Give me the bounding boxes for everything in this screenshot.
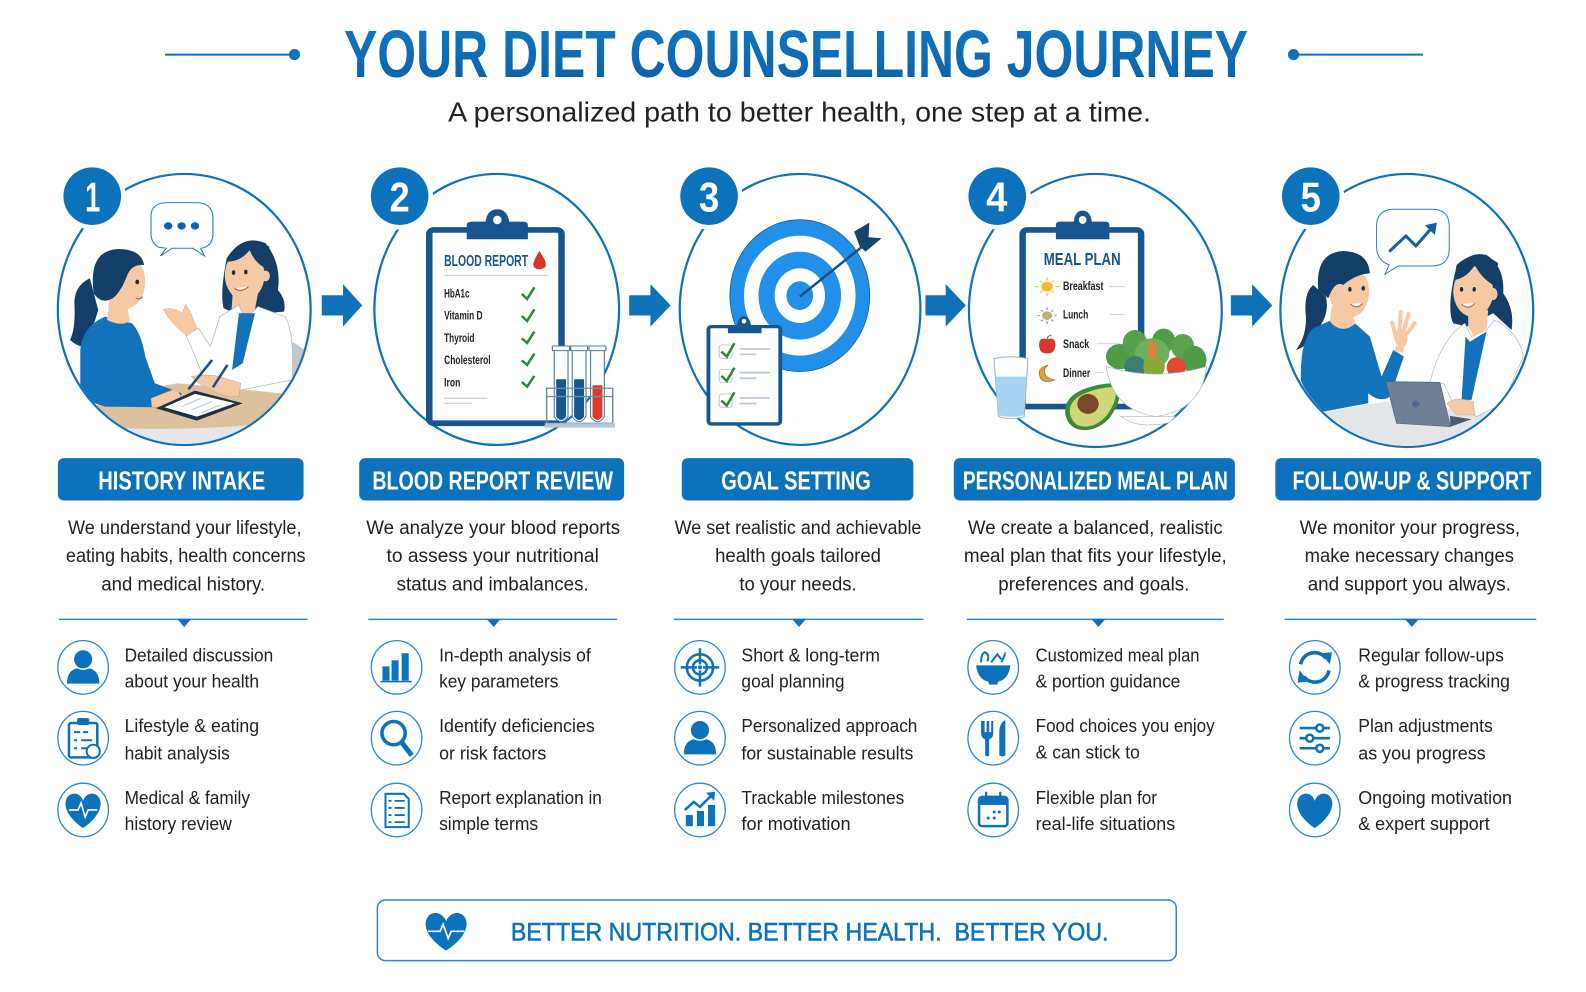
description: step 3: health goals tailored xyxy=(715,546,881,567)
bullet text: deficiencies: Identify deficiencies xyxy=(439,716,595,736)
description: step 3 xyxy=(675,518,921,596)
icon: magnifier xyxy=(371,711,422,765)
bullet text: medical: Medical & family xyxy=(125,788,251,808)
step 5 bullets xyxy=(1290,641,1512,837)
bullet text: adjustments: as you progress xyxy=(1358,743,1486,763)
description: step 1 xyxy=(66,518,306,596)
description: step 3: We set realistic and achievable xyxy=(675,518,921,539)
bullet text: flexible: real-life situations xyxy=(1036,814,1175,834)
bullet text: report: simple terms xyxy=(439,814,538,834)
step 4 bullets xyxy=(968,641,1216,837)
heading pill: blood report review: BLOOD REPORT REVIEW xyxy=(372,465,613,495)
step 4 illustration: meal plan xyxy=(969,174,1222,447)
bullet text: deficiencies xyxy=(439,716,595,763)
step 2 illustration: blood report: HbA1c xyxy=(444,287,470,300)
icon: growth chart xyxy=(675,783,725,837)
bullet text: adjustments: Plan adjustments xyxy=(1358,716,1493,736)
icon: bowl xyxy=(968,641,1019,694)
bullet text: discussion: Detailed discussion xyxy=(125,645,273,665)
bullet text: milestones: Trackable milestones xyxy=(741,788,904,808)
description: step 2: We analyze your blood reports xyxy=(366,518,620,539)
step 2 illustration: blood report: Cholesterol xyxy=(444,354,491,367)
step 5 badge xyxy=(1277,163,1344,230)
step 2 illustration: blood report: Thyroid xyxy=(444,332,474,345)
icon: crosshair target xyxy=(675,641,725,694)
step 3 illustration: goal target xyxy=(680,174,920,445)
heading pill: history intake: HISTORY INTAKE xyxy=(98,465,265,495)
icon: footer heart pulse xyxy=(426,913,467,951)
bullet text: personalized xyxy=(741,716,917,763)
step 4 illustration: meal plan: Snack xyxy=(1063,338,1090,351)
icon: heart pulse xyxy=(58,783,108,837)
step 3 badge: 3 xyxy=(699,173,719,220)
icon: document xyxy=(371,783,422,837)
bullet text: flexible xyxy=(1036,788,1175,834)
bullet text: adjustments xyxy=(1358,716,1493,763)
icon: bar chart xyxy=(371,641,422,694)
bullet text: analysis: key parameters xyxy=(439,672,558,692)
bullet text: food choices: Food choices you enjoy xyxy=(1036,716,1216,736)
heading pill: blood report review xyxy=(359,458,624,501)
step 2 illustration: blood report: BLOOD REPORT xyxy=(444,253,528,270)
bullet text: meal plan: Customized meal plan xyxy=(1036,645,1200,665)
bullet text: personalized: Personalized approach xyxy=(741,716,917,736)
bullet text: milestones xyxy=(741,788,904,834)
bullet text: discussion xyxy=(125,645,273,692)
step 2 illustration: blood report xyxy=(374,174,619,445)
description: step 5: We monitor your progress, xyxy=(1300,518,1520,539)
bullet text: food choices xyxy=(1036,716,1216,762)
description: step 4: We create a balanced, realistic xyxy=(968,518,1223,539)
step 5 illustration: follow-up xyxy=(1280,174,1533,457)
icon: person xyxy=(675,711,725,765)
description: step 2: status and imbalances. xyxy=(397,575,589,596)
description: step 5 xyxy=(1300,518,1520,596)
food: glass, avocado, salad bowl xyxy=(994,329,1206,430)
step 2 badge: 2 xyxy=(390,173,410,220)
heading pill: follow-up and support xyxy=(1275,458,1541,501)
bullet text: analysis: In-depth analysis of xyxy=(439,645,592,665)
description: step 4: preferences and goals. xyxy=(998,575,1189,596)
heading pill: goal setting xyxy=(682,458,913,501)
icon: person xyxy=(58,641,108,694)
step 2 badge xyxy=(366,163,433,230)
icon: calendar xyxy=(968,783,1019,837)
footer tagline: BETTER NUTRITION. BETTER HEALTH. BETTER YOU. xyxy=(511,918,1108,946)
step 1 illustration: consultation xyxy=(58,174,315,450)
step 4 badge xyxy=(964,163,1031,230)
arrow 4 to 5 xyxy=(1231,284,1272,327)
bullet text: planning: Short & long-term xyxy=(741,645,880,665)
description: step 1: and medical history. xyxy=(101,575,265,596)
bullet text: lifestyle: habit analysis xyxy=(125,743,230,763)
bullet text: milestones: for motivation xyxy=(741,814,851,834)
arrow 1 to 2 xyxy=(322,284,362,327)
step 4 illustration: meal plan: MEAL PLAN xyxy=(1044,249,1121,269)
subtitle: A personalized path to better health, one step at a time. xyxy=(448,96,1151,127)
icon: clipboard xyxy=(58,711,108,765)
icon: sliders xyxy=(1290,711,1340,765)
title ornament: left xyxy=(165,49,300,60)
bullet text: report xyxy=(439,788,602,834)
bullet text: motivation: Ongoing motivation xyxy=(1358,788,1512,808)
bullet text: flexible: Flexible plan for xyxy=(1036,788,1157,808)
bullet text: motivation xyxy=(1358,788,1512,834)
title ornament: right xyxy=(1288,49,1423,60)
description: step 2: to assess your nutritional xyxy=(386,546,599,567)
description: step 3: to your needs. xyxy=(739,575,857,596)
step 4 badge: 4 xyxy=(986,173,1007,220)
heading pill: goal setting: GOAL SETTING xyxy=(721,465,871,495)
description: step 1: We understand your lifestyle, xyxy=(68,518,302,539)
icon: refresh xyxy=(1290,641,1340,694)
footer banner xyxy=(377,900,1176,961)
description: step 5: and support you always. xyxy=(1308,575,1511,596)
bullet text: medical: history review xyxy=(125,814,233,834)
bullet text: motivation: & expert support xyxy=(1358,814,1490,834)
bullet text: planning: goal planning xyxy=(741,672,845,692)
icon: fork and knife xyxy=(968,711,1019,765)
step 4 illustration: meal plan: Dinner xyxy=(1063,367,1091,380)
bullet text: discussion: about your health xyxy=(125,672,259,692)
step 2 illustration: blood report: Vitamin D xyxy=(444,310,483,323)
step 4 illustration: meal plan: Breakfast xyxy=(1063,280,1104,293)
bullet text: planning xyxy=(741,645,880,692)
bullet text: meal plan: & portion guidance xyxy=(1036,672,1180,692)
heading pill: history intake xyxy=(58,458,304,501)
bullet text: lifestyle: Lifestyle & eating xyxy=(125,716,259,736)
description: step 4: meal plan that fits your lifestyle, xyxy=(964,546,1227,567)
bullet text: follow-ups: Regular follow-ups xyxy=(1358,645,1504,665)
bullet text: analysis xyxy=(439,645,592,692)
bullet text: meal plan xyxy=(1036,645,1200,692)
step 3 badge xyxy=(676,163,742,230)
step 2 bullets xyxy=(371,641,602,837)
bullet text: follow-ups: & progress tracking xyxy=(1358,672,1510,692)
arrow 2 to 3 xyxy=(629,284,671,327)
bullet text: deficiencies: or risk factors xyxy=(439,743,546,763)
step 4 illustration: meal plan: Lunch xyxy=(1063,309,1088,322)
bullet text: report: Report explanation in xyxy=(439,788,602,808)
description: step 4 xyxy=(964,518,1227,596)
heading pill: personalized meal plan xyxy=(954,458,1235,501)
test tubes xyxy=(545,346,615,428)
description: step 1: eating habits, health concerns xyxy=(66,546,306,567)
description: step 5: make necessary changes xyxy=(1305,546,1514,567)
bullet text: food choices: & can stick to xyxy=(1036,742,1140,762)
step 3 bullets xyxy=(675,641,917,837)
arrow 3 to 4 xyxy=(925,284,966,327)
icon: heart xyxy=(1290,783,1340,837)
bullet text: follow-ups xyxy=(1358,645,1510,692)
step 1 badge xyxy=(59,163,126,230)
bullet text: lifestyle xyxy=(125,716,259,763)
step 1 bullets xyxy=(58,641,273,837)
bullet text: medical xyxy=(125,788,251,834)
step 5 badge: 5 xyxy=(1301,173,1321,220)
title: YOUR DIET COUNSELLING JOURNEY xyxy=(344,18,1248,92)
step 2 illustration: blood report: Iron xyxy=(444,376,460,389)
bullet text: personalized: for sustainable results xyxy=(741,743,913,763)
step 1 badge: 1 xyxy=(85,173,100,220)
description: step 2 xyxy=(366,518,620,596)
heading pill: personalized meal plan: PERSONALIZED MEAL PLAN xyxy=(963,465,1228,495)
